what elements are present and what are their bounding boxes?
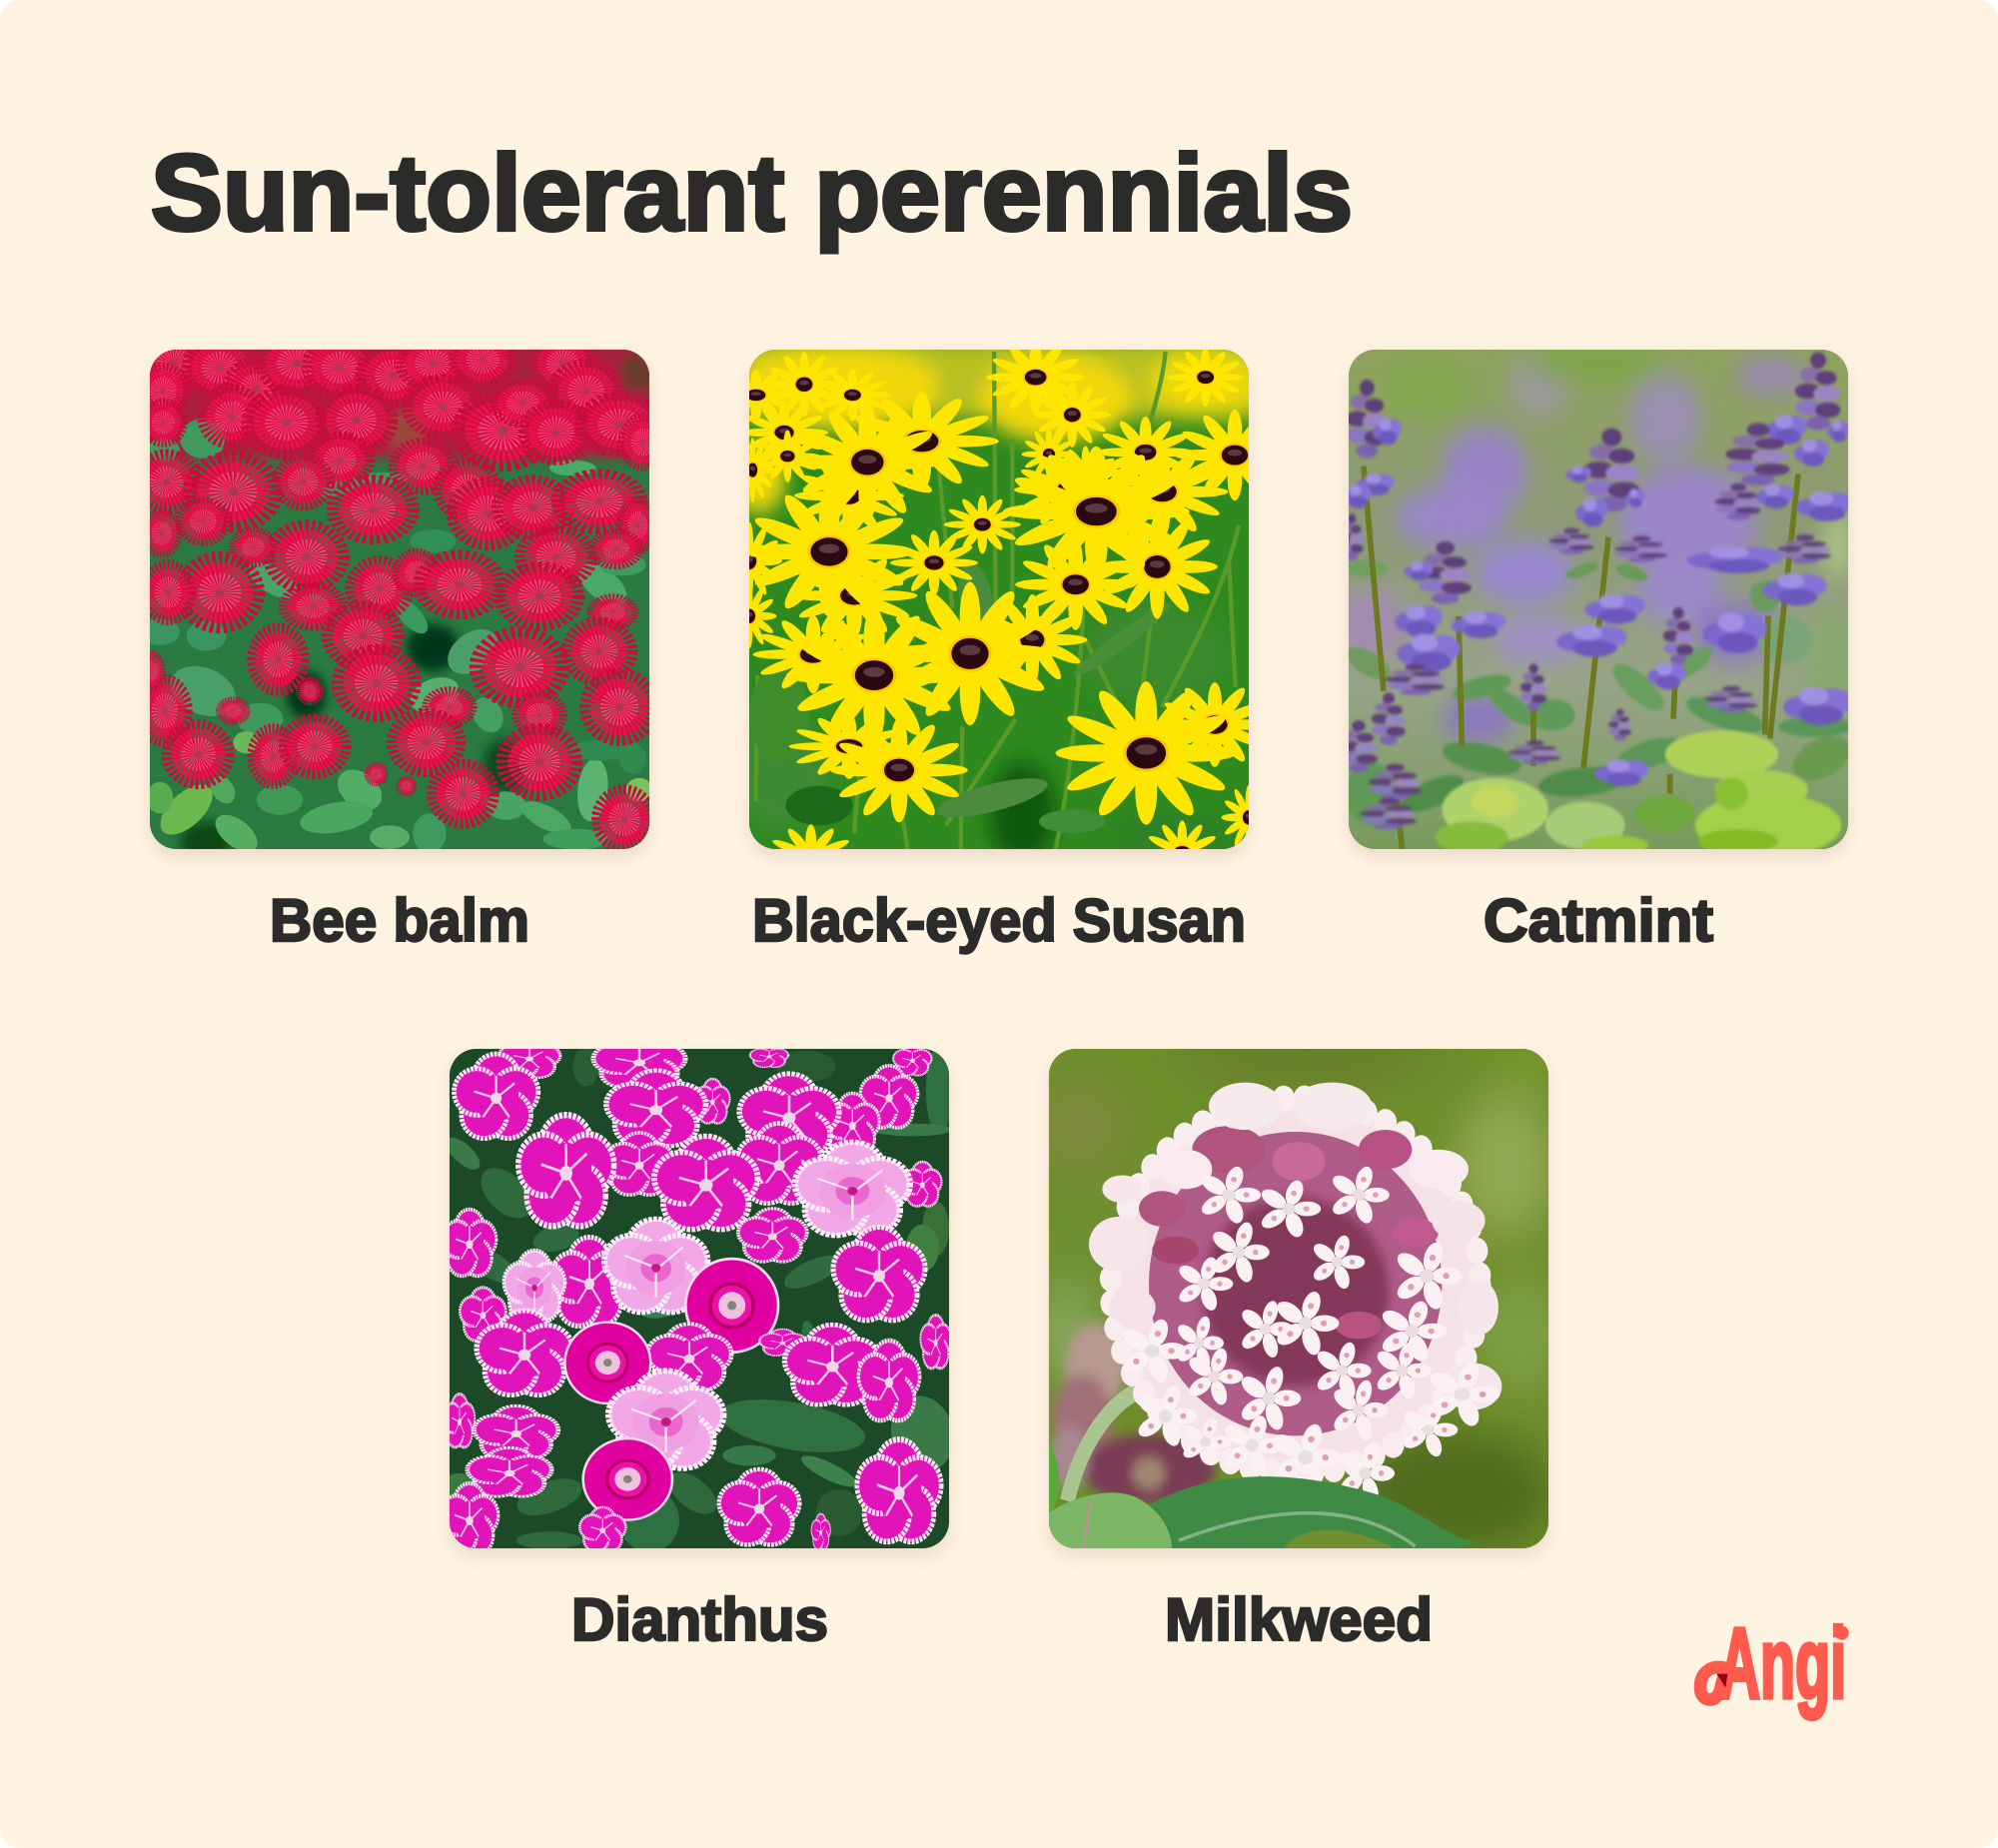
label: milkweed: Milkweed (1165, 1586, 1433, 1653)
light green foliage (1436, 730, 1841, 857)
label: bee balm: Bee balm (270, 887, 529, 954)
blurred background (729, 340, 1272, 865)
dianthus leaves (442, 1047, 967, 1552)
leaves (1049, 1441, 1479, 1552)
leaves (140, 419, 652, 859)
catmint flower spikes (1340, 352, 1853, 829)
blurred background (1029, 1031, 1568, 1556)
stems and leaves (756, 352, 1239, 849)
leaves (1344, 560, 1855, 825)
photo: black-eyed Susan (749, 350, 1249, 849)
logo: Angi (1694, 1607, 1849, 1722)
rudbeckia flowers (712, 342, 1295, 890)
bee balm blooms (145, 345, 654, 837)
title: Sun-tolerant perennials (151, 132, 1353, 253)
stems (1364, 466, 1798, 849)
flower head (1089, 1083, 1501, 1473)
label: dianthus: Dianthus (571, 1586, 828, 1653)
photo: milkweed (1049, 1049, 1548, 1548)
photo: dianthus (450, 1049, 949, 1548)
stem (1067, 1390, 1139, 1501)
blurred lavender background (1336, 344, 1858, 742)
white florets (1119, 1165, 1499, 1505)
background bud cluster (1049, 1324, 1216, 1505)
label: catmint: Catmint (1484, 887, 1713, 954)
photo: bee balm (150, 350, 649, 849)
photo: catmint (1349, 350, 1848, 849)
dianthus blooms (441, 1035, 951, 1554)
label: black-eyed Susan: Black-eyed Susan (752, 887, 1246, 954)
upper background (140, 340, 672, 861)
